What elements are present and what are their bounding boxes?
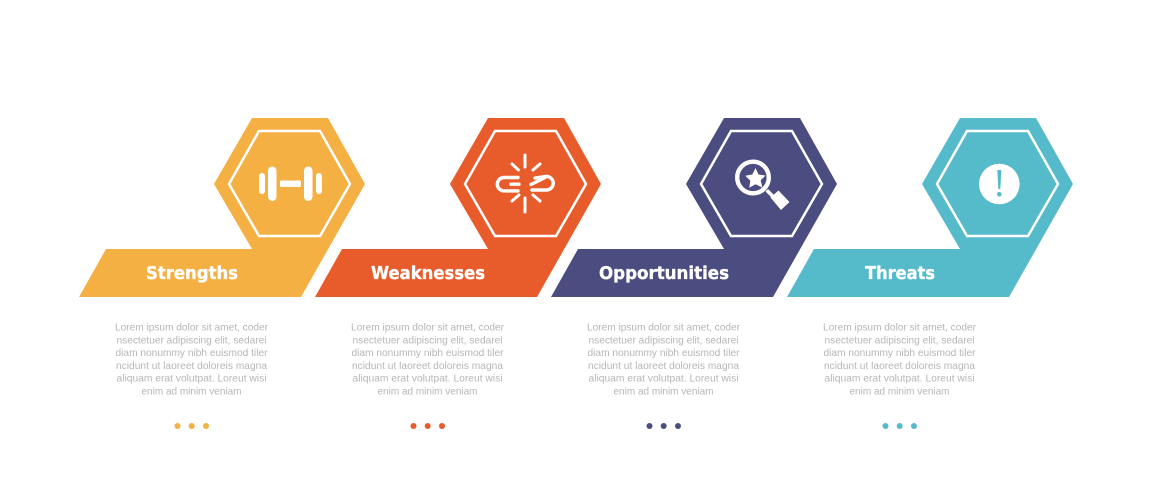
heading: strengths: Strengths — [146, 264, 238, 284]
text block: weaknesses: Lorem ipsum dolor sit amet, coder — [351, 322, 505, 334]
inner hexagon outline: weaknesses — [465, 131, 586, 236]
dots: opportunities — [646, 423, 681, 429]
text block: threats: ncidunt ut laoreet doloreis magna — [824, 361, 975, 372]
panel: strengths — [79, 118, 365, 429]
text block: opportunities: nsectetuer adipiscing elit, sedarei — [588, 335, 738, 346]
inner hexagon outline: threats — [937, 131, 1058, 236]
text block: weaknesses: ncidunt ut laoreet doloreis magna — [352, 361, 503, 372]
text block: opportunities: ncidunt ut laoreet doloreis magna — [588, 361, 739, 372]
icon: alert circle — [979, 164, 1020, 204]
text block: strengths: Lorem ipsum dolor sit amet, coder — [115, 322, 269, 334]
text block: weaknesses: nsectetuer adipiscing elit, sedarei — [352, 335, 502, 346]
text block: weaknesses — [351, 322, 505, 398]
icon: magnifier with star — [737, 162, 790, 210]
text block: opportunities — [587, 322, 741, 398]
text block: opportunities: aliquam erat volutpat. Loreut wisi — [588, 374, 738, 385]
text block: threats: Lorem ipsum dolor sit amet, coder — [823, 322, 977, 334]
text block: strengths: nsectetuer adipiscing elit, sedarei — [116, 335, 266, 346]
text block: strengths — [115, 322, 269, 398]
inner hexagon outline: strengths — [229, 131, 350, 236]
inner hexagon outline: opportunities — [701, 131, 822, 236]
text block: threats: aliquam erat volutpat. Loreut wisi — [824, 374, 974, 385]
hexagon banner: threats — [787, 118, 1073, 297]
text block: opportunities: enim ad minim veniam — [614, 386, 714, 398]
text block: threats: nsectetuer adipiscing elit, sedarei — [824, 335, 974, 346]
text block: opportunities: Lorem ipsum dolor sit amet, coder — [587, 322, 741, 334]
icon: dumbbell — [259, 166, 322, 201]
text block: weaknesses: diam nonummy nibh euismod tiler — [352, 348, 504, 359]
hexagon banner: opportunities — [551, 118, 837, 297]
heading: weaknesses: Weaknesses — [371, 264, 485, 284]
hexagon banner: strengths — [79, 118, 365, 297]
dots: threats — [882, 423, 917, 429]
panel: opportunities — [551, 118, 837, 429]
text block: weaknesses: enim ad minim veniam — [378, 386, 478, 398]
hexagon banner: weaknesses — [315, 118, 601, 297]
text block: opportunities: diam nonummy nibh euismod tiler — [588, 348, 740, 359]
text block: strengths: ncidunt ut laoreet doloreis magna — [116, 361, 267, 372]
dots: weaknesses — [410, 423, 445, 429]
text block: threats: enim ad minim veniam — [850, 386, 950, 398]
text block: weaknesses: aliquam erat volutpat. Loreut wisi — [352, 374, 502, 385]
dots: strengths — [174, 423, 209, 429]
panel: threats — [787, 118, 1073, 429]
icon: broken chain — [497, 155, 553, 212]
heading: opportunities: Opportunities — [599, 264, 729, 284]
text block: threats: diam nonummy nibh euismod tiler — [824, 348, 976, 359]
panel: weaknesses — [315, 118, 601, 429]
heading: threats: Threats — [865, 264, 935, 284]
text block: threats — [823, 322, 977, 398]
text block: strengths: aliquam erat volutpat. Loreut wisi — [116, 374, 266, 385]
text block: strengths: enim ad minim veniam — [142, 386, 242, 398]
text block: strengths: diam nonummy nibh euismod tiler — [116, 348, 268, 359]
